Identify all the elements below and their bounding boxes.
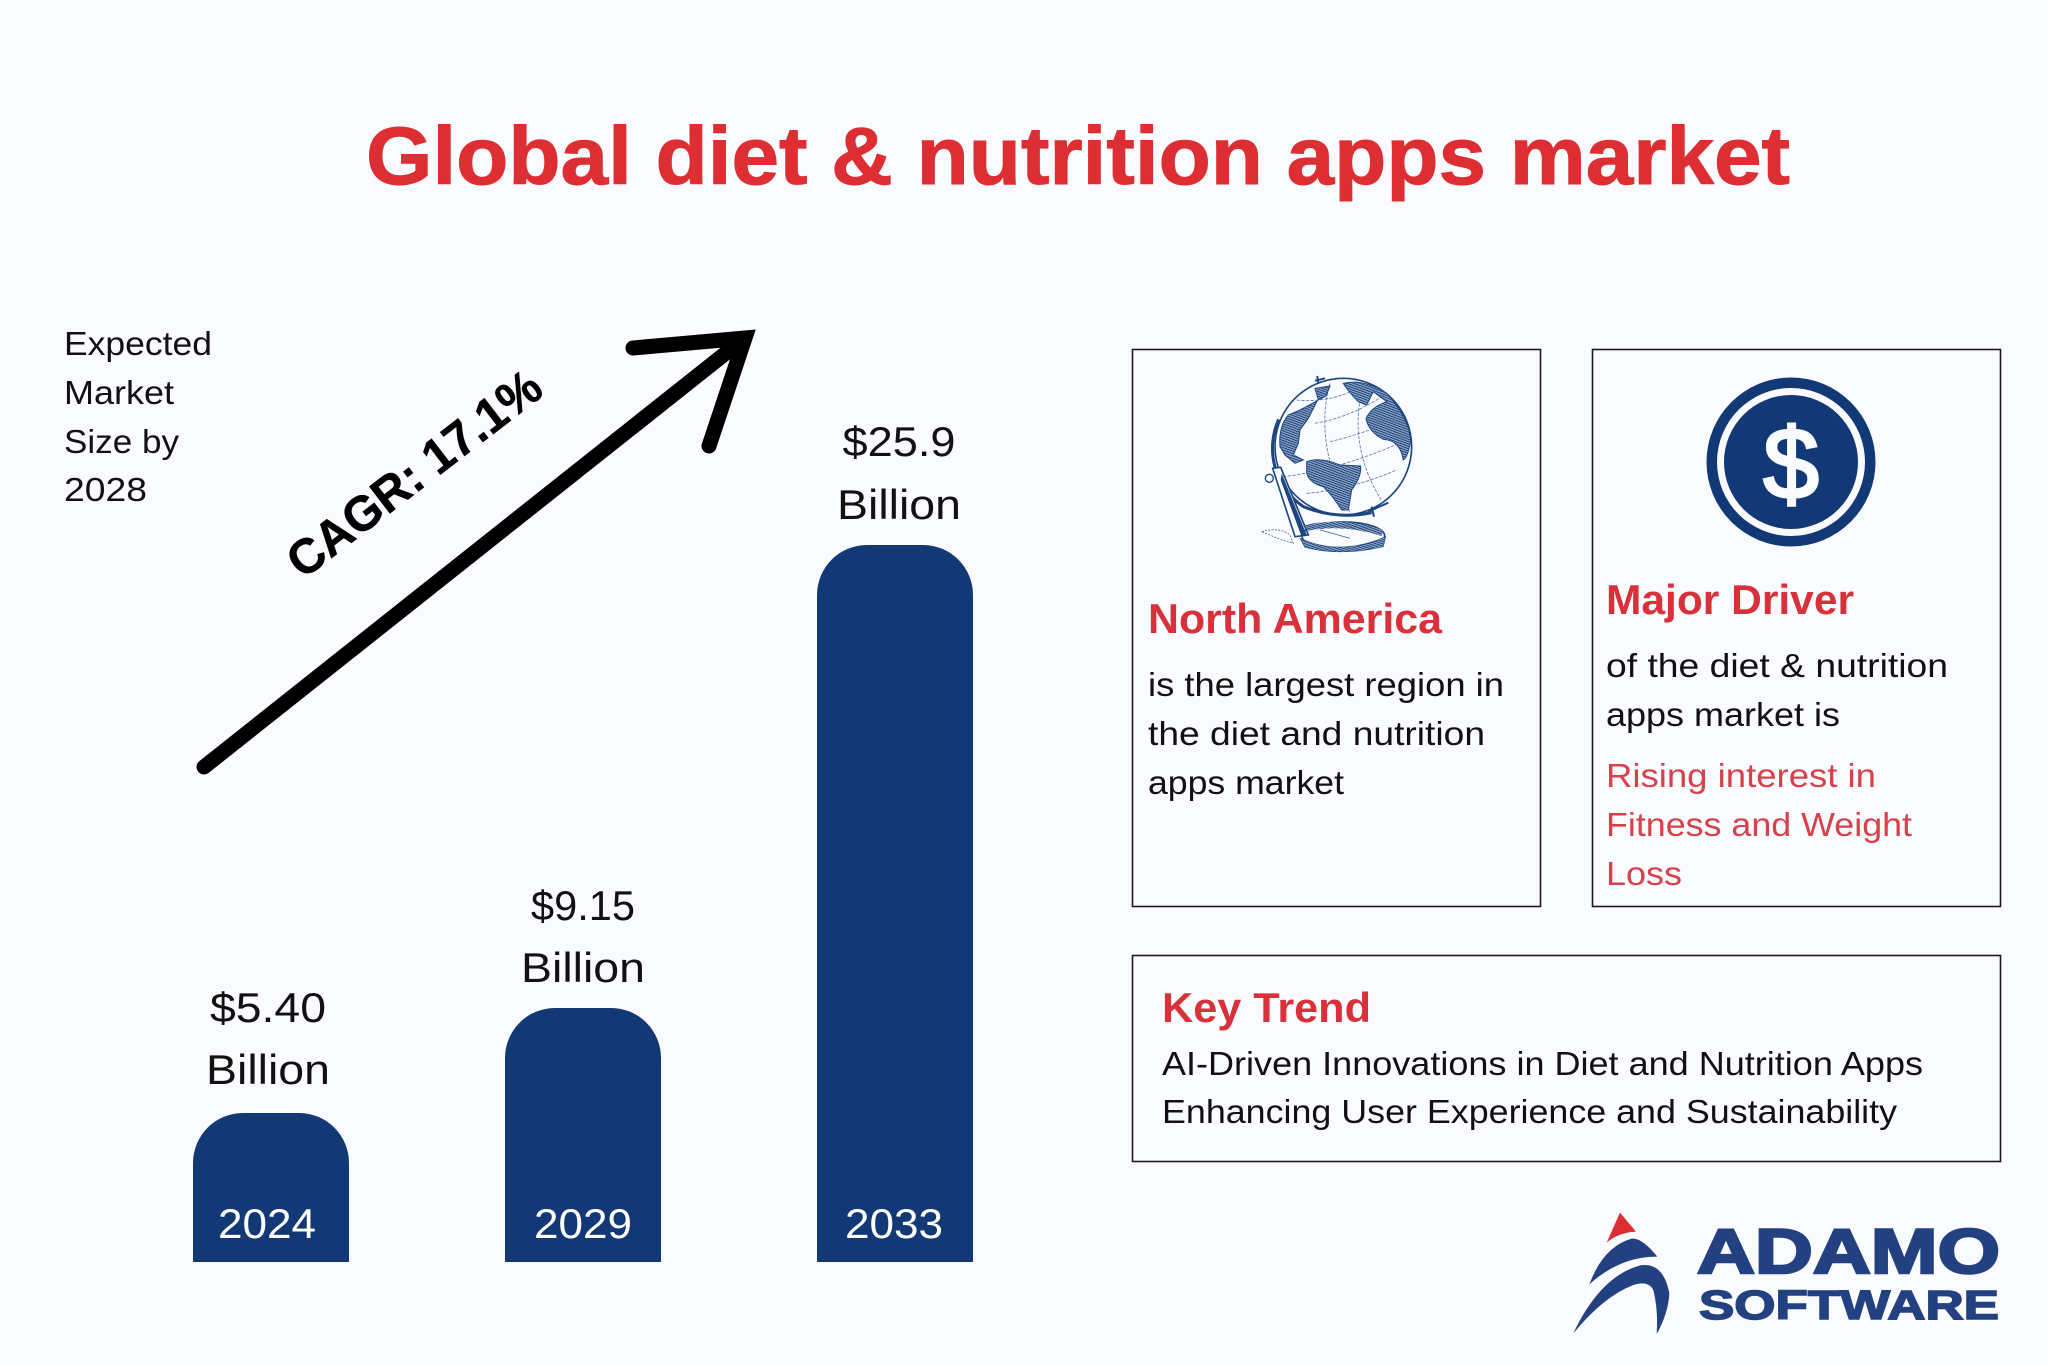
text block: expected market size: Expected	[64, 325, 212, 362]
text block: expected market size	[64, 325, 212, 508]
bar: 2033	[817, 418, 973, 1262]
icon: dollar coin: $	[1763, 408, 1819, 520]
heading: Key Trend: Key Trend	[1162, 984, 1371, 1031]
icon: globe	[1262, 376, 1412, 552]
logo: Adamo Software: SOFTWARE	[1699, 1282, 1999, 1328]
bar: 2024: 2024	[218, 1200, 316, 1247]
panel: Key Trend	[1132, 956, 2000, 1162]
continents	[1280, 382, 1411, 510]
arrow: growth	[204, 338, 745, 767]
panel: North America	[1132, 350, 1540, 906]
text block: driver: Rising interest in	[1606, 757, 1876, 794]
text block: trend	[1162, 1045, 1923, 1130]
text block: region: the diet and nutrition	[1148, 715, 1485, 752]
text block: driver	[1606, 757, 1912, 892]
logo: Adamo Software	[1573, 1213, 2000, 1334]
bar: 2024	[193, 984, 349, 1262]
text block: region: is the largest region in	[1148, 666, 1504, 703]
bar: 2029: Billion	[521, 944, 645, 991]
bar: 2024: Billion	[206, 1046, 330, 1093]
text block: driver: Fitness and Weight	[1606, 806, 1912, 843]
bar: 2029: $9.15	[531, 882, 635, 929]
text block: driver intro: apps market is	[1606, 696, 1840, 733]
text block: region	[1148, 666, 1504, 801]
bar: 2029: 2029	[534, 1200, 632, 1247]
icon: logo mark	[1573, 1213, 1669, 1334]
label: CAGR: CAGR: 17.1%	[277, 360, 552, 589]
text block: driver: Loss	[1606, 855, 1682, 892]
text block: expected market size: 2028	[64, 471, 147, 508]
heading: North America: North America	[1148, 595, 1443, 642]
bar: 2033: 2033	[845, 1200, 943, 1247]
text block: region: apps market	[1148, 764, 1344, 801]
panel: Major Driver	[1592, 350, 2000, 906]
heading: Major Driver: Major Driver	[1606, 576, 1854, 623]
bar chart	[193, 418, 973, 1262]
text block: expected market size: Market	[64, 374, 174, 411]
title: Global diet & nutrition apps market	[366, 111, 1790, 202]
text block: driver intro: of the diet & nutrition	[1606, 647, 1948, 684]
text block: trend: Enhancing User Experience and Sustainability	[1162, 1093, 1898, 1130]
bar: 2033: $25.9	[842, 418, 956, 465]
wordmark: ADAMO	[1697, 1217, 2000, 1287]
text block: expected market size: Size by	[64, 423, 180, 460]
text block: trend: AI-Driven Innovations in Diet and Nutrition Apps	[1162, 1045, 1923, 1082]
icon: dollar coin	[1706, 378, 1876, 546]
text block: driver intro	[1606, 647, 1948, 733]
bar: 2024: $5.40	[210, 984, 326, 1031]
bar: 2033: Billion	[837, 481, 961, 528]
bar: 2029	[505, 882, 661, 1262]
